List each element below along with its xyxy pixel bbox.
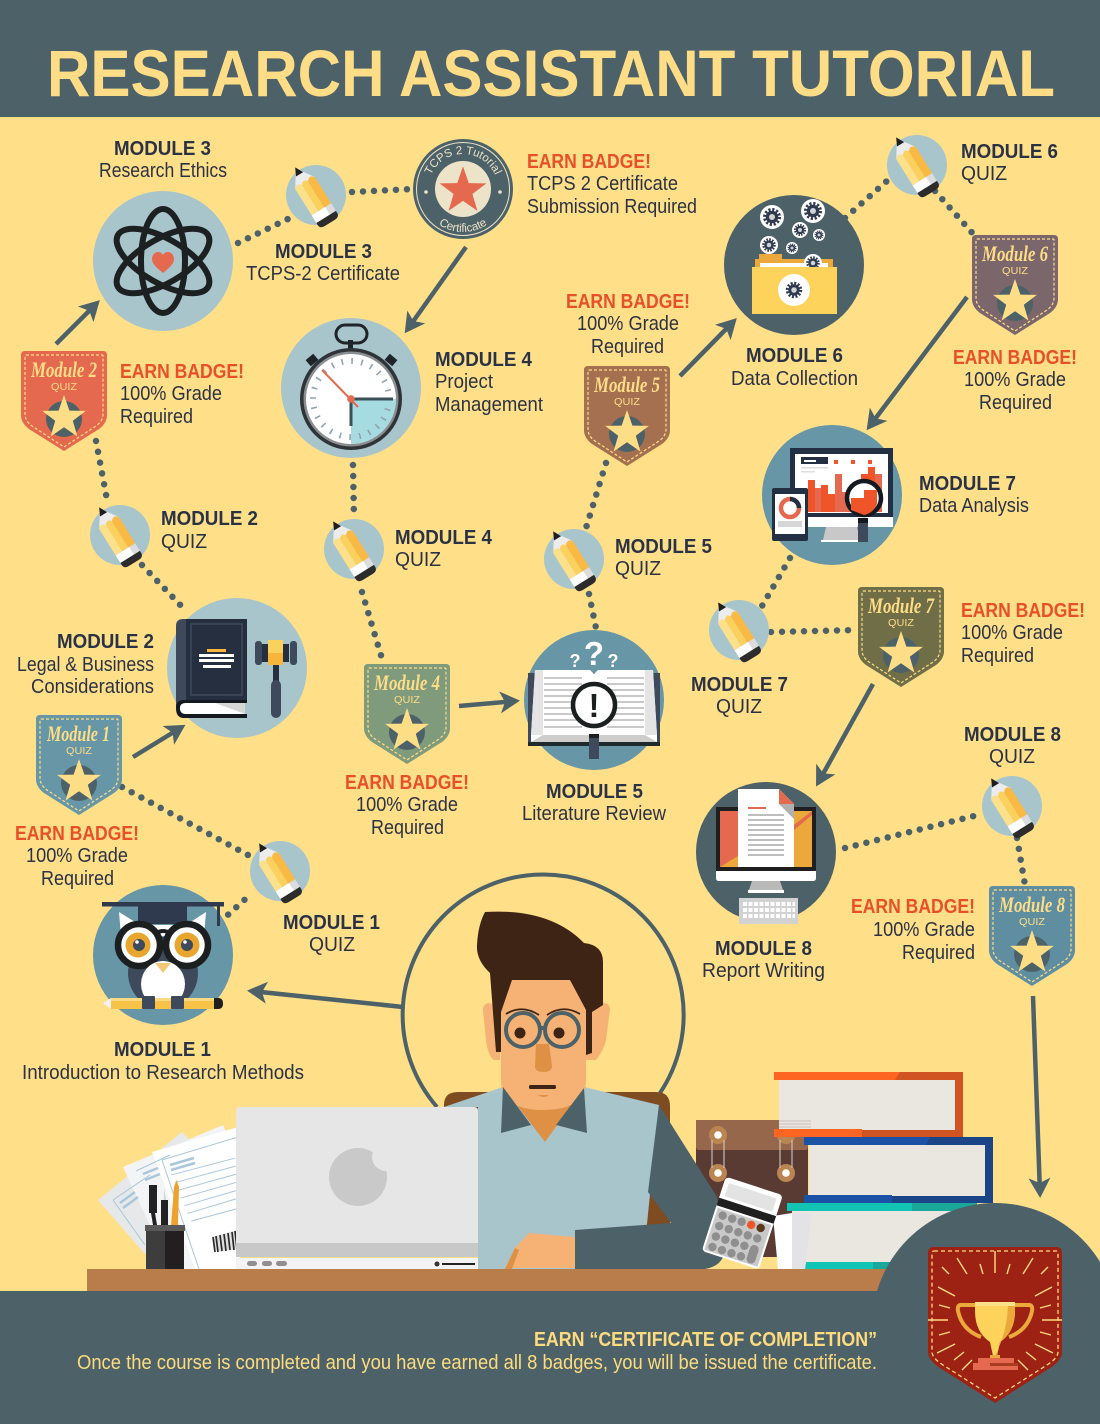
text: earn badge module 5 bbox=[566, 291, 690, 358]
text: earn badge module 5: Required bbox=[591, 336, 664, 358]
badge: module 4: Module 4 bbox=[373, 670, 440, 695]
icon: open book and magnifier, module 5: ? bbox=[584, 635, 604, 672]
text: earn badge module 1 bbox=[15, 823, 139, 890]
badge: module 6: QUIZ bbox=[1002, 265, 1029, 277]
footer band bbox=[0, 1291, 1100, 1424]
icon: pencil, module 8 quiz bbox=[981, 772, 1042, 840]
text: earn badge module 6: EARN BADGE! bbox=[953, 347, 1077, 369]
badge: module 4: QUIZ bbox=[394, 694, 421, 706]
text: module 1 quiz bbox=[283, 912, 380, 956]
text: module 2 quiz: QUIZ bbox=[161, 531, 207, 553]
text: module 4 quiz: MODULE 4 bbox=[395, 527, 493, 549]
completion badge with trophy bbox=[928, 1247, 1062, 1403]
arrow: module 7 badge to module 8 bbox=[818, 684, 873, 783]
text: earn badge module 4: Required bbox=[371, 817, 444, 839]
text: module 1 quiz: MODULE 1 bbox=[283, 912, 380, 934]
text: earn badge module 6: Required bbox=[979, 392, 1052, 414]
text: module 7 quiz bbox=[691, 674, 788, 718]
text: module 6 quiz: QUIZ bbox=[961, 163, 1007, 185]
text: earn badge module 4: 100% Grade bbox=[356, 794, 458, 816]
text: earn certificate: EARN BADGE! bbox=[527, 151, 651, 173]
text: module 4 project management: MODULE 4 bbox=[435, 349, 533, 371]
arrow: module 8 badge to certificate bbox=[1033, 996, 1040, 1194]
text: earn badge module 6: 100% Grade bbox=[964, 369, 1066, 391]
header band bbox=[0, 0, 1100, 117]
text: module 5 quiz: QUIZ bbox=[615, 558, 661, 580]
text: earn badge module 1: 100% Grade bbox=[26, 845, 128, 867]
text: module 6 data collection bbox=[731, 345, 858, 390]
text: module 2 legal bbox=[17, 631, 154, 698]
desk scene: laptop bbox=[236, 1107, 478, 1269]
icon: open book and magnifier, module 5 bbox=[524, 630, 664, 770]
arrow: researcher to module 1 bbox=[251, 991, 403, 1007]
badge: module 6 bbox=[972, 235, 1058, 335]
text: module 1 quiz: QUIZ bbox=[309, 934, 355, 956]
badge: module 8 bbox=[989, 886, 1075, 986]
badge: module 2 bbox=[21, 351, 107, 451]
text: module 1 intro: MODULE 1 bbox=[114, 1039, 211, 1061]
icon: folder with gears, module 6 bbox=[724, 195, 864, 335]
badge: module 2: Module 2 bbox=[30, 357, 97, 382]
text: earn badge module 2: EARN BADGE! bbox=[120, 361, 244, 383]
text: module 4 project management: Management bbox=[435, 394, 543, 416]
text: module 5 quiz: MODULE 5 bbox=[615, 536, 712, 558]
text: module 2 legal: Considerations bbox=[31, 676, 154, 698]
icon: computer with document, module 8 bbox=[696, 782, 836, 924]
footer text: Once the course is completed and you have earned all 8 badges, you will be issued the certificate. bbox=[77, 1352, 877, 1374]
text: earn badge module 5: 100% Grade bbox=[577, 313, 679, 335]
text: module 5 literature review bbox=[522, 781, 667, 825]
text: earn badge module 4 bbox=[345, 772, 469, 839]
badge: module 6: Module 6 bbox=[981, 241, 1048, 266]
icon: pencil, module 5 quiz bbox=[543, 525, 604, 593]
text: earn badge module 8 bbox=[851, 896, 975, 964]
desk scene: briefcase bbox=[696, 1120, 808, 1257]
certificate seal bbox=[413, 139, 513, 239]
text: module 8 quiz bbox=[964, 724, 1061, 768]
text: module 7 quiz: QUIZ bbox=[716, 696, 762, 718]
footer text: EARN “CERTIFICATE OF COMPLETION” bbox=[534, 1329, 877, 1351]
text: earn badge module 7 bbox=[961, 600, 1085, 667]
text: module 2 quiz bbox=[161, 508, 258, 553]
text: module 4 project management: Project bbox=[435, 371, 493, 393]
text: earn badge module 8: 100% Grade bbox=[873, 919, 975, 941]
text: earn badge module 6 bbox=[953, 347, 1077, 414]
arrow: module 5 badge to module 6 bbox=[680, 321, 734, 376]
badge: module 1 bbox=[36, 715, 122, 815]
text: module 5 literature review: Literature Review bbox=[522, 803, 667, 825]
text: module 6 quiz: MODULE 6 bbox=[961, 141, 1058, 163]
text: earn badge module 5: EARN BADGE! bbox=[566, 291, 690, 313]
text: module 2 legal: Legal & Business bbox=[17, 654, 154, 676]
text: earn badge module 1: Required bbox=[41, 868, 114, 890]
icon: atom, module 3 bbox=[93, 191, 233, 331]
text: module 5 quiz bbox=[615, 536, 712, 580]
text: module 8 report writing bbox=[702, 938, 825, 982]
text: earn badge module 8: Required bbox=[902, 942, 975, 964]
text: module 6 quiz bbox=[961, 141, 1058, 185]
text: earn badge module 2: Required bbox=[120, 406, 193, 428]
icon: pencil, module 2 quiz bbox=[89, 501, 150, 569]
icon: open book and magnifier, module 5: ! bbox=[588, 687, 600, 724]
text: earn badge module 7: Required bbox=[961, 645, 1034, 667]
text: earn badge module 2 bbox=[120, 361, 244, 428]
icon: open book and magnifier, module 5: ? bbox=[570, 651, 580, 671]
text: module 4 quiz bbox=[395, 527, 493, 571]
badge: module 4 bbox=[364, 664, 450, 764]
desk scene: stack of books bbox=[773, 1072, 993, 1269]
icon: monitor, tablet and magnifier, module 7 bbox=[762, 425, 902, 565]
text: earn badge module 4: EARN BADGE! bbox=[345, 772, 469, 794]
badge: module 7: QUIZ bbox=[888, 617, 915, 629]
text: earn badge module 8: EARN BADGE! bbox=[851, 896, 975, 918]
text: module 5 literature review: MODULE 5 bbox=[546, 781, 643, 803]
badge: module 8: Module 8 bbox=[998, 892, 1065, 917]
badge: module 2: QUIZ bbox=[51, 381, 78, 393]
icon: pencil, module 1 quiz bbox=[249, 837, 310, 905]
badge: module 1: Module 1 bbox=[46, 721, 110, 746]
icon: owl with cap, module 1 bbox=[93, 885, 233, 1025]
icon: open book and magnifier, module 5: ? bbox=[608, 651, 618, 671]
badge: module 7: Module 7 bbox=[867, 593, 935, 618]
desk scene: calculator bbox=[702, 1177, 783, 1269]
arrow: module 2 badge to module 3 bbox=[56, 303, 97, 344]
badge: module 7 bbox=[858, 587, 944, 687]
text: module 1 intro: Introduction to Research Methods bbox=[22, 1062, 304, 1084]
arrow: module 1 badge to module 2 bbox=[133, 727, 182, 757]
arrow: module 6 badge to module 7 bbox=[869, 297, 967, 427]
icon: pencil, module 6 quiz bbox=[886, 131, 947, 199]
desk surface bbox=[87, 1269, 887, 1291]
icon: pencil, module 7 quiz bbox=[708, 596, 769, 664]
icon: pencil, module 4 quiz bbox=[323, 515, 384, 583]
icon: pencil, module 3 quiz bbox=[285, 161, 346, 229]
arrow: certificate to module 4 bbox=[407, 247, 466, 330]
text: module 8 report writing: Report Writing bbox=[702, 960, 825, 982]
text: module 2 legal: MODULE 2 bbox=[57, 631, 154, 653]
icon: stopwatch, module 4 bbox=[281, 318, 421, 458]
text: module 3 research ethics bbox=[99, 138, 227, 182]
text: module 3 certificate: MODULE 3 bbox=[275, 241, 372, 263]
text: earn certificate: TCPS 2 Certificate bbox=[527, 173, 678, 195]
badge: module 1: QUIZ bbox=[66, 745, 93, 757]
text: module 1 intro bbox=[22, 1039, 304, 1084]
dotted path connectors bbox=[96, 180, 1025, 922]
text: module 8 quiz: MODULE 8 bbox=[964, 724, 1061, 746]
text: module 6 data collection: Data Collection bbox=[731, 368, 858, 390]
desk scene: pen holder bbox=[145, 1180, 185, 1269]
text: module 3 research ethics: MODULE 3 bbox=[114, 138, 211, 160]
text: earn badge module 1: EARN BADGE! bbox=[15, 823, 139, 845]
text: module 8 report writing: MODULE 8 bbox=[715, 938, 812, 960]
badge: module 5: QUIZ bbox=[614, 396, 641, 408]
certificate seal: TCPS 2 Tutorial bbox=[424, 146, 502, 174]
text: module 7 data analysis: MODULE 7 bbox=[919, 473, 1016, 495]
desk scene: researcher bbox=[403, 874, 684, 1269]
text: module 4 quiz: QUIZ bbox=[395, 549, 441, 571]
footer text bbox=[77, 1329, 877, 1374]
text: module 6 data collection: MODULE 6 bbox=[746, 345, 843, 367]
badge: module 5 bbox=[584, 366, 670, 466]
icon: law book and gavel, module 2 bbox=[167, 598, 307, 738]
text: earn badge module 7: 100% Grade bbox=[961, 622, 1063, 644]
text: module 4 project management bbox=[435, 349, 543, 416]
text: module 2 quiz: MODULE 2 bbox=[161, 508, 258, 530]
text: earn certificate: Submission Required bbox=[527, 196, 697, 218]
text: module 7 data analysis: Data Analysis bbox=[919, 495, 1029, 517]
desk scene: papers bbox=[98, 1125, 241, 1269]
text: earn certificate bbox=[527, 151, 697, 218]
text: module 7 quiz: MODULE 7 bbox=[691, 674, 788, 696]
badge: module 5: Module 5 bbox=[593, 372, 660, 397]
badge: module 8: QUIZ bbox=[1019, 916, 1046, 928]
text: module 7 data analysis bbox=[919, 473, 1029, 517]
arrow: module 4 badge to module 5 bbox=[459, 701, 516, 706]
text: module 3 research ethics: Research Ethics bbox=[99, 160, 227, 182]
text: earn badge module 7: EARN BADGE! bbox=[961, 600, 1085, 622]
text: module 3 certificate: TCPS-2 Certificate bbox=[246, 263, 400, 285]
text: earn badge module 2: 100% Grade bbox=[120, 383, 222, 405]
text: module 8 quiz: QUIZ bbox=[989, 746, 1035, 768]
certificate seal: Certificate bbox=[440, 219, 486, 232]
desk scene: sleeve bbox=[575, 1105, 725, 1269]
text: module 3 certificate bbox=[246, 241, 400, 285]
footer medallion semicircle bbox=[872, 1203, 1100, 1424]
